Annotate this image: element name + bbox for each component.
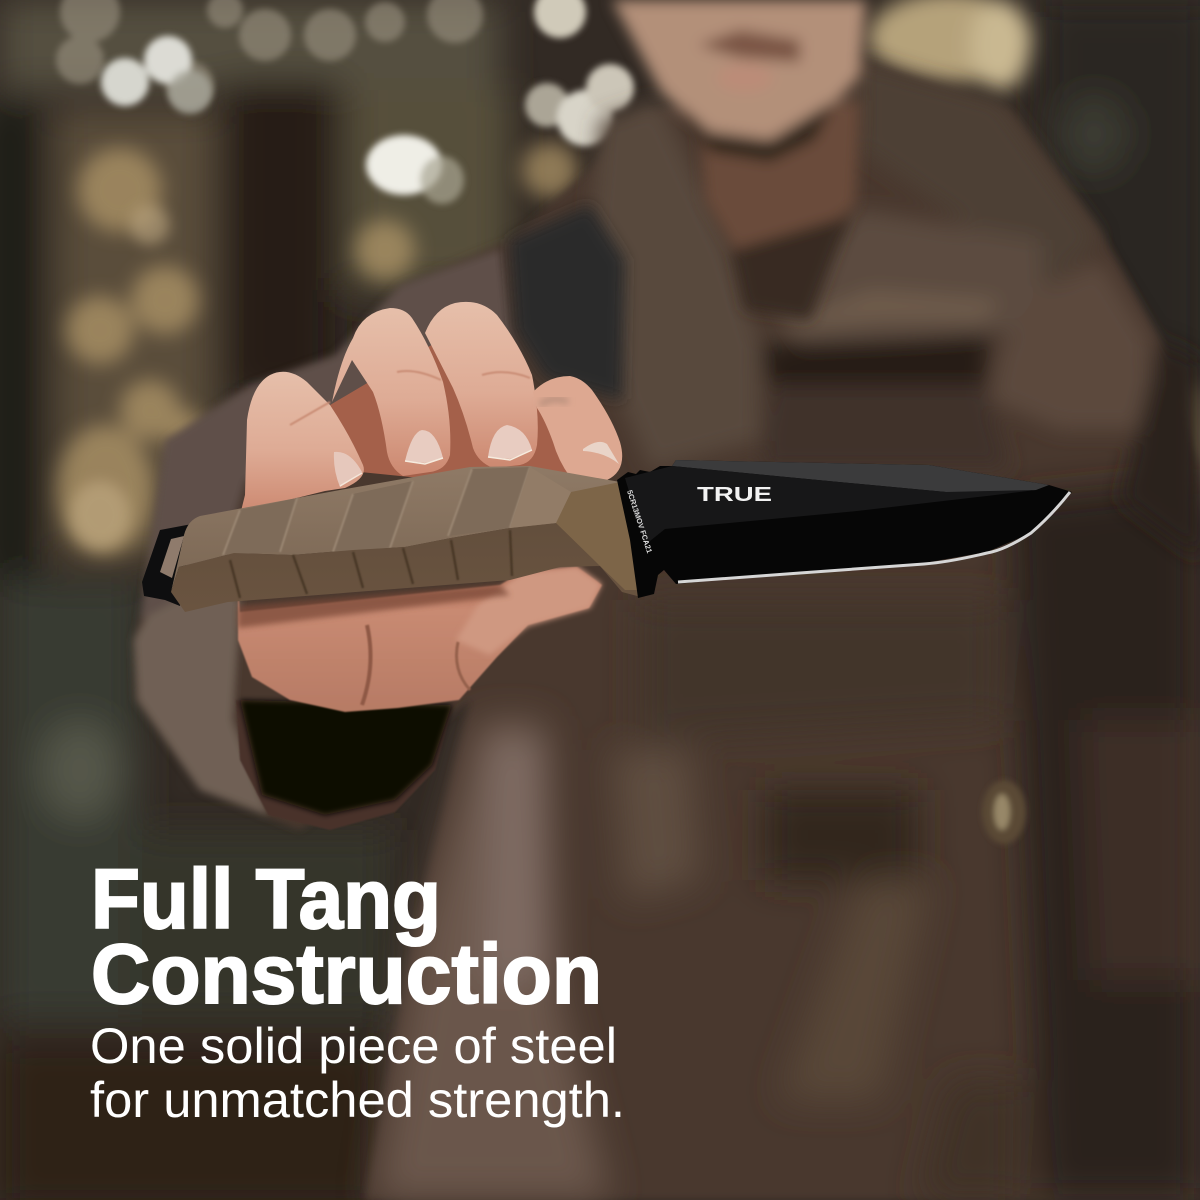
palm and thumb below the handle — [238, 566, 602, 712]
headline line one: Full Tang — [91, 852, 441, 946]
blade steel marking: 5CR13MOV FCA21 — [625, 489, 654, 554]
knife handle upper faces — [171, 466, 620, 592]
knife — [142, 460, 1072, 612]
knife handle lower faces — [171, 467, 643, 612]
fingernails — [334, 425, 619, 487]
knife blade — [617, 460, 1072, 598]
man: backpack strap — [509, 205, 625, 400]
man: neck and face — [612, 0, 866, 320]
subtext line two: for unmatched strength. — [90, 1072, 625, 1128]
headline line two: Construction — [91, 927, 602, 1021]
bokeh lights — [56, 0, 1200, 555]
knife lanyard tang — [142, 524, 192, 606]
fingers above the handle — [240, 302, 622, 515]
knife edge highlight — [678, 492, 1070, 582]
hand — [238, 302, 622, 712]
blade logo: TRUE — [697, 484, 772, 506]
man: sleeve cuff — [236, 700, 452, 830]
text block — [90, 852, 625, 1128]
man: jacket button — [982, 780, 1026, 844]
subtext line one: One solid piece of steel — [90, 1018, 617, 1074]
